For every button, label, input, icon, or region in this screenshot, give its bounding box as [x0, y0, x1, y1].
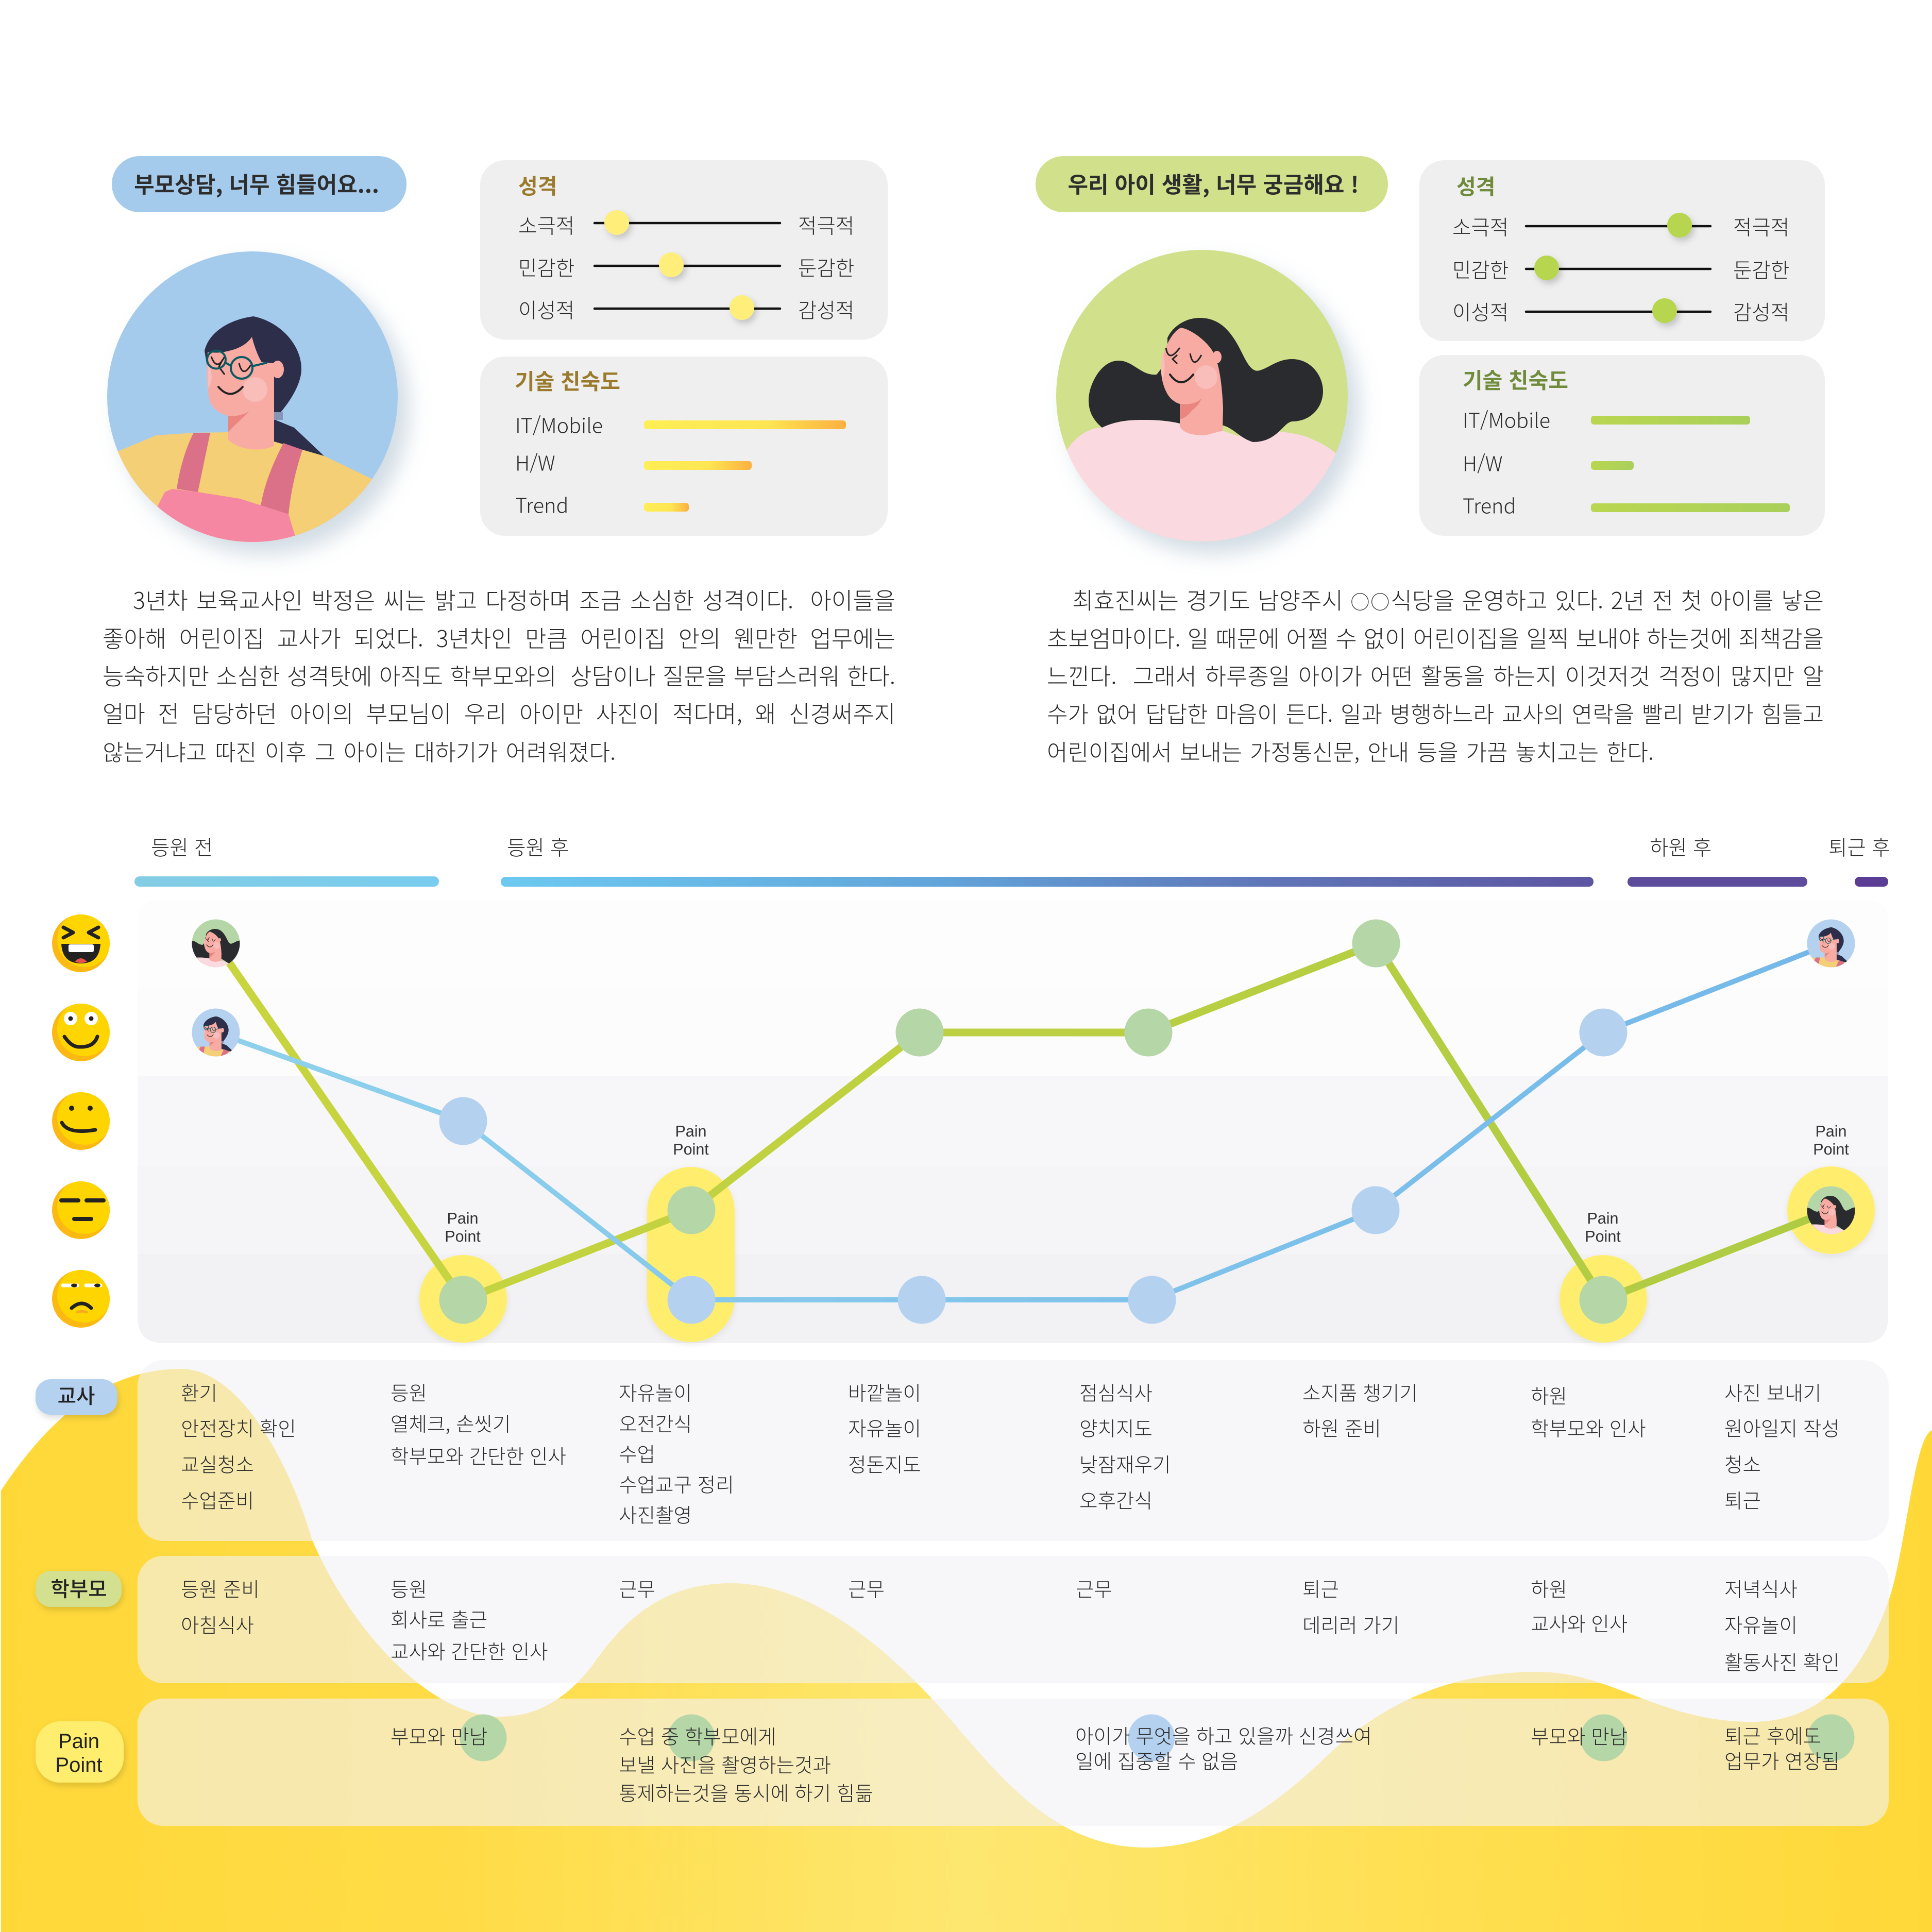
avatar: teacher end: [1807, 919, 1855, 968]
teacher row text: 교실청소: [181, 1449, 254, 1478]
panel: persona 1 personality: [480, 160, 888, 340]
parent row text: 근무: [848, 1574, 885, 1603]
teacher row text: 청소: [1724, 1449, 1761, 1478]
pain point labels: Point: [1813, 1141, 1849, 1158]
teacher row text: 자유놀이: [619, 1378, 692, 1406]
persona 2 title pill: [1036, 156, 1388, 212]
teacher row text: 열체크, 손씻기: [391, 1409, 511, 1437]
panel: persona 1 skills: H/W: [515, 447, 555, 477]
text block: parent persona description: [1047, 584, 1824, 766]
pain point labels: Pain: [675, 1123, 707, 1140]
panel: emotion chart background: [138, 900, 1888, 1343]
panel: persona 2 personality: 적극적: [1733, 211, 1789, 241]
pain point row text: 업무가 연장됨: [1724, 1746, 1840, 1775]
teacher row text: [181, 1378, 1840, 1529]
persona 1 portrait: [107, 251, 418, 563]
teacher row text: 등원: [391, 1378, 427, 1406]
pain point labels: Pain: [1587, 1210, 1619, 1227]
teacher row text: 하원: [1531, 1381, 1567, 1410]
avatar: teacher start: [192, 1009, 240, 1056]
panel: persona 2 personality: [1419, 160, 1825, 341]
panel: persona 1 personality: 감성적: [798, 295, 854, 324]
panel: persona 1 skills: 기술 친숙도: [515, 365, 620, 396]
pain point row text: [391, 1721, 1840, 1807]
persona 2 portrait: [1051, 250, 1360, 567]
parent row text: 등원 준비: [181, 1574, 260, 1603]
avatar: parent start: [192, 919, 240, 968]
panel: pain point row: [138, 1699, 1889, 1826]
persona 2 title pill: 우리 아이 생활, 너무 궁금해요 !: [1068, 167, 1359, 199]
parent row text: 아침식사: [181, 1610, 254, 1639]
panel: persona 2 skills: [1419, 355, 1825, 536]
stage timeline: 등원 전: [151, 832, 213, 861]
row label: parent: 학부모: [50, 1573, 107, 1602]
teacher row text: 점심식사: [1079, 1378, 1153, 1406]
pain point labels: Pain: [1815, 1123, 1847, 1140]
parent row text: 퇴근: [1302, 1574, 1339, 1603]
icon: smiling emoji: [52, 1090, 112, 1150]
chart: parent emotion line: [216, 943, 1831, 1300]
panel: persona 2 skills: IT/Mobile: [1463, 405, 1550, 434]
row label: pain point: Pain: [58, 1730, 99, 1753]
text block: teacher persona description: [103, 584, 895, 766]
pain point labels: Pain: [447, 1210, 479, 1227]
teacher row text: 자유놀이: [848, 1413, 921, 1442]
parent row text: 데리러 가기: [1302, 1610, 1399, 1639]
teacher row text: 하원 준비: [1302, 1413, 1381, 1442]
panel: parent row: [138, 1556, 1889, 1683]
pain point row text: 부모와 만남: [1531, 1721, 1628, 1750]
pain point row markers: [460, 1715, 1855, 1761]
parent row text: 하원: [1531, 1574, 1567, 1603]
teacher row text: 사진촬영: [619, 1500, 692, 1529]
stage timeline: 등원 후: [507, 832, 569, 861]
teacher row text: 오전간식: [619, 1409, 692, 1437]
panel: persona 2 personality: 성격: [1456, 170, 1495, 200]
avatar: parent end: [1807, 1186, 1855, 1234]
background wave: [1, 1369, 1932, 1932]
row label: pain point: [36, 1721, 124, 1783]
chart: parent nodes: [439, 919, 1627, 1324]
stage timeline: 퇴근 후: [1828, 832, 1890, 861]
chart: teacher emotion line: [216, 943, 1831, 1300]
panel: persona 1 personality: 성격: [518, 169, 557, 200]
pain point highlights: [419, 1166, 1875, 1343]
parent row text: 등원: [391, 1574, 427, 1603]
panel: persona 2 skills: H/W: [1463, 448, 1503, 477]
parent row text: 교사와 간단한 인사: [391, 1636, 548, 1665]
teacher row text: 소지품 챙기기: [1302, 1378, 1418, 1406]
parent row text: 근무: [1076, 1574, 1112, 1603]
pain point row text: 수업 중 학부모에게: [619, 1721, 776, 1750]
row label: teacher: 교사: [58, 1380, 95, 1410]
pain point labels: [445, 1123, 1849, 1245]
panel: persona 2 skills: 기술 친숙도: [1463, 364, 1568, 395]
teacher row text: 수업: [619, 1439, 655, 1468]
panel: persona 1 personality: 소극적: [518, 210, 574, 239]
teacher row text: 낮잠재우기: [1079, 1449, 1171, 1478]
teacher row text: 학부모와 간단한 인사: [391, 1441, 566, 1470]
row label: teacher: [36, 1379, 117, 1415]
teacher row text: 원아일지 작성: [1724, 1413, 1840, 1442]
panel: persona 2 personality: 감성적: [1733, 297, 1789, 326]
parent row text: 자유놀이: [1724, 1610, 1798, 1639]
parent row text: 교사와 인사: [1531, 1608, 1628, 1637]
row label: pain point: Point: [55, 1754, 103, 1776]
teacher row text: 수업교구 정리: [619, 1469, 734, 1498]
teacher row text: 환기: [181, 1378, 217, 1406]
icon: happy emoji: [52, 1002, 112, 1061]
panel: persona 2 personality: 소극적: [1452, 211, 1509, 241]
panel: persona 1 skills: Trend: [515, 489, 568, 519]
icon: neutral emoji: [52, 1179, 112, 1239]
parent row text: [181, 1574, 1840, 1676]
teacher row text: 정돈지도: [848, 1449, 921, 1478]
pain point labels: Point: [445, 1228, 481, 1245]
persona 1 title pill: [112, 156, 406, 212]
panel: persona 1 personality: 둔감한: [798, 252, 854, 281]
parent row text: 회사로 출근: [391, 1604, 487, 1633]
stage timeline: 하원 후: [1650, 832, 1711, 861]
teacher row text: 사진 보내기: [1724, 1378, 1821, 1406]
icon: laughing emoji: [52, 912, 112, 972]
teacher row text: 수업준비: [181, 1485, 254, 1514]
parent row text: 저녁식사: [1724, 1574, 1798, 1603]
stage timeline: [134, 832, 1890, 887]
panel: persona 2 personality: 둔감한: [1733, 255, 1789, 283]
chart: teacher nodes: [439, 1009, 1627, 1324]
panel: persona 1 personality: 민감한: [518, 252, 574, 281]
pain point row text: 통제하는것을 동시에 하기 힘듦: [619, 1778, 873, 1807]
teacher row text: 바깥놀이: [848, 1378, 921, 1406]
panel: persona 1 skills: IT/Mobile: [515, 410, 603, 439]
panel: persona 2 skills: Trend: [1463, 490, 1516, 519]
panel: teacher row: [138, 1360, 1889, 1541]
pain point row text: 아이가 무엇을 하고 있을까 신경쓰여: [1075, 1721, 1372, 1750]
teacher row text: 학부모와 인사: [1531, 1413, 1646, 1442]
teacher row text: 오후간식: [1079, 1485, 1153, 1514]
pain point row text: 부모와 만남: [391, 1721, 487, 1750]
pain point row text: 퇴근 후에도: [1724, 1721, 1821, 1750]
pain point row text: 보낼 사진을 촬영하는것과: [619, 1750, 831, 1778]
parent row text: 활동사진 확인: [1724, 1647, 1840, 1676]
panel: persona 1 personality: 적극적: [798, 210, 854, 239]
panel: persona 1 skills: [480, 357, 888, 536]
panel: persona 1 personality: 이성적: [518, 295, 574, 324]
panel: persona 2 personality: 이성적: [1452, 297, 1509, 326]
pain point labels: Point: [1585, 1228, 1621, 1245]
icon: unhappy emoji: [52, 1268, 112, 1328]
teacher row text: 안전장치 확인: [181, 1413, 296, 1442]
pain point labels: Point: [673, 1141, 709, 1158]
parent row text: 근무: [619, 1574, 655, 1603]
teacher row text: 퇴근: [1724, 1485, 1761, 1514]
panel: persona 2 personality: 민감한: [1452, 255, 1509, 283]
teacher row text: 양치지도: [1079, 1413, 1153, 1442]
row label: parent: [36, 1571, 122, 1607]
pain point row text: 일에 집중할 수 없음: [1075, 1746, 1238, 1775]
persona 1 title pill: 부모상담, 너무 힘들어요...: [134, 167, 379, 199]
